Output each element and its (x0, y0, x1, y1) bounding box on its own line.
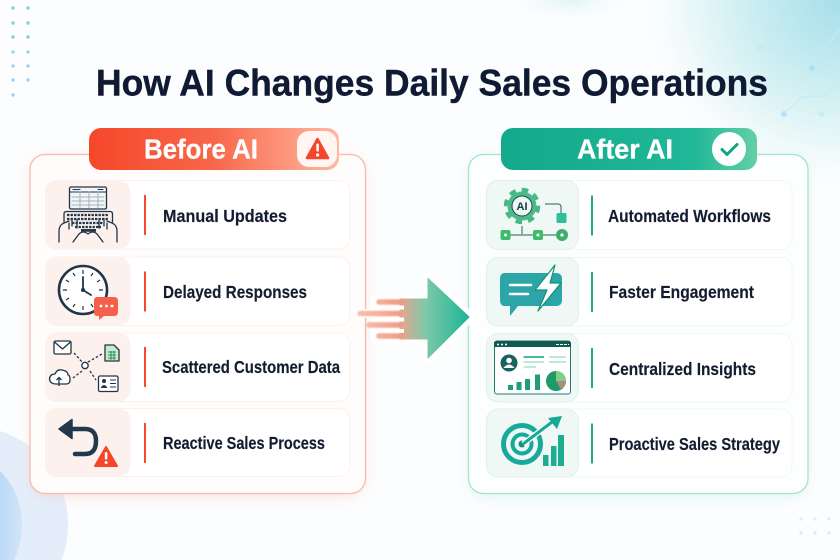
row: proactive sales strategy: Proactive Sales Strategy (609, 434, 780, 454)
icon: AI gear workflow (500, 190, 568, 241)
row: reactive sales process: Reactive Sales Process (163, 433, 325, 453)
heading: before AI: Before AI (144, 134, 258, 164)
row: scattered customer data (46, 333, 350, 402)
row: delayed responses: Delayed Responses (163, 282, 307, 302)
row: manual updates (46, 180, 350, 249)
row: proactive sales strategy (486, 409, 792, 477)
panel: after AI (468, 128, 808, 496)
row: reactive sales process (46, 408, 350, 476)
heading: after AI: After AI (577, 134, 673, 164)
icon: analytics dashboard (494, 341, 571, 394)
arrow: before to after (358, 274, 474, 361)
icon: chat bubble with lightning (500, 265, 562, 316)
row: faster engagement: Faster Engagement (609, 282, 754, 302)
row: scattered customer data: Scattered Customer Data (162, 357, 340, 377)
row: automated workflows: Automated Workflows (608, 206, 771, 226)
panel: before AI (30, 128, 366, 496)
row: automated workflows (486, 180, 792, 250)
icon: target with growth bars (504, 416, 564, 466)
heading: after AI (501, 128, 757, 170)
heading: before AI (89, 128, 339, 170)
row: delayed responses (46, 257, 350, 326)
row: manual updates: Manual Updates (163, 206, 287, 226)
title: How AI Changes Daily Sales Operations (96, 62, 768, 104)
icon: keyboard and spreadsheet (59, 187, 117, 242)
row: faster engagement (486, 258, 792, 326)
icon: clock with chat bubble (59, 266, 118, 320)
row: centralized insights: Centralized Insights (609, 359, 756, 379)
row: centralized insights (486, 334, 792, 402)
icon: AI gear workflow: AI (516, 201, 528, 213)
icon: scattered data network (50, 341, 119, 392)
icon: return arrow with warning (59, 420, 117, 466)
